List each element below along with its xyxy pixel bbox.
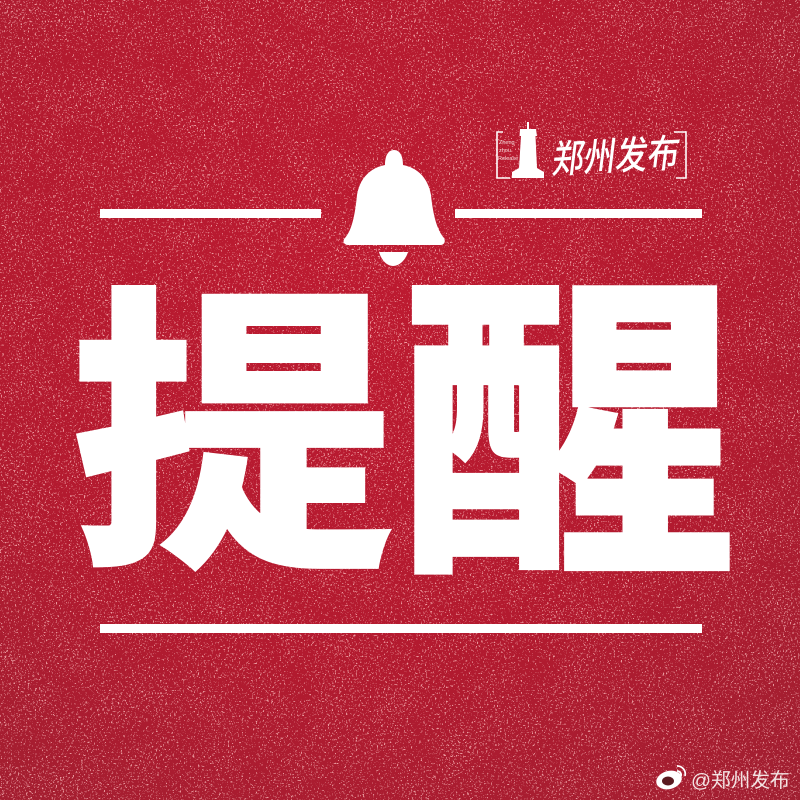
logo bracket left	[497, 132, 510, 178]
icon: weibo	[654, 766, 685, 792]
logo small English text: zhou	[499, 148, 511, 154]
icon: bell	[344, 150, 445, 266]
logo tower icon	[512, 122, 544, 178]
top rule left	[100, 209, 321, 218]
watermark handle: @郑州发布	[691, 770, 790, 792]
title character 醒: 醒	[398, 178, 737, 638]
title character 提: 提	[71, 194, 395, 631]
logo small English text: Zheng	[499, 140, 515, 146]
logo bracket right	[674, 132, 686, 178]
logo small English text: Release	[498, 156, 518, 162]
logo calligraphy title: 郑州发布	[550, 123, 683, 185]
bottom rule	[100, 624, 702, 633]
logo: Zhengzhou Release	[497, 122, 686, 185]
title: 提醒	[71, 178, 737, 638]
top rule right	[455, 209, 702, 218]
watermark	[654, 766, 790, 792]
